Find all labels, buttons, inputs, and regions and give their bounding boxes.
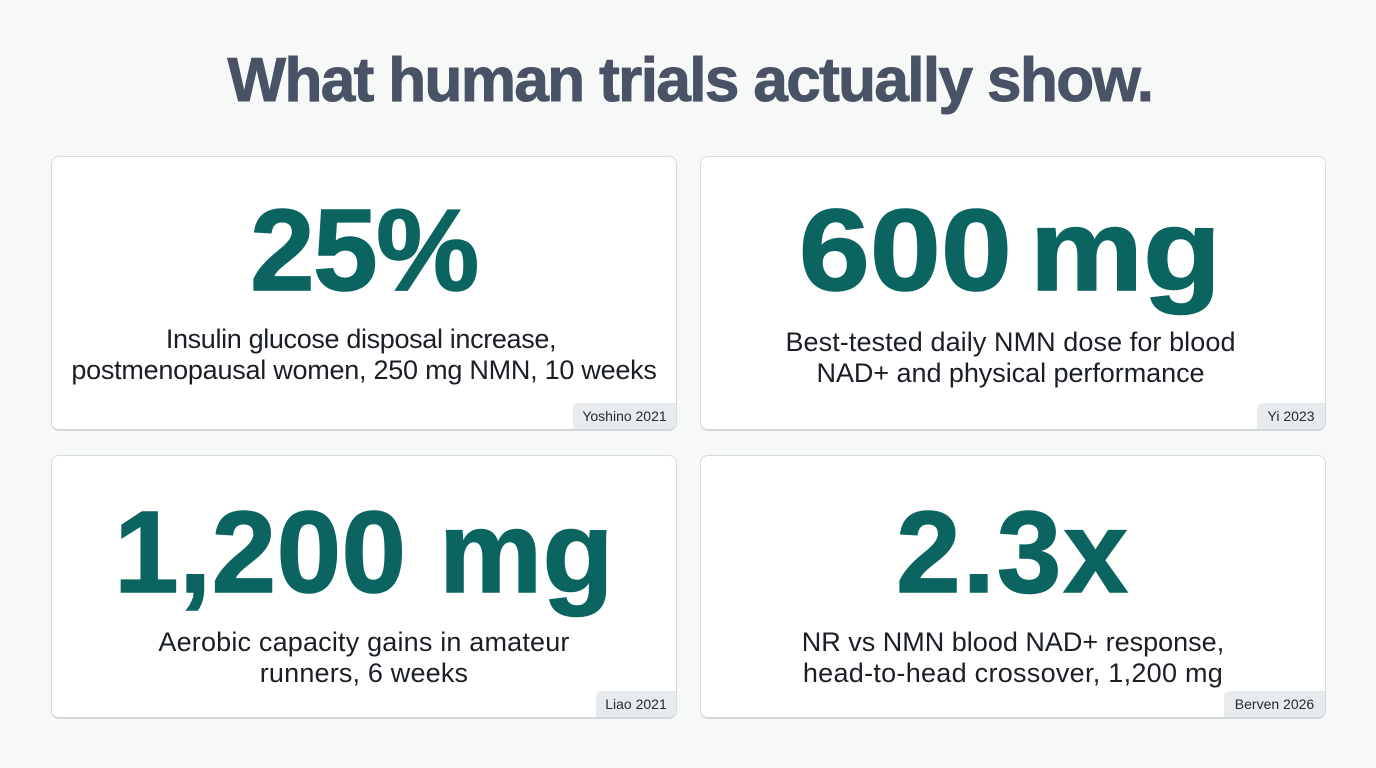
description: aerobic capacity <box>158 627 570 688</box>
source tag: Yoshino 2021: Yoshino 2021 <box>582 408 667 424</box>
description: NR vs NMN <box>802 627 1224 688</box>
panel: 2.3x stat <box>700 455 1326 719</box>
title: What human trials actually show. <box>228 46 1152 115</box>
panel: 600 mg stat <box>700 156 1326 431</box>
source tag: Yi 2023: Yi 2023 <box>1268 408 1314 424</box>
description: aerobic capacity: runners, 6 weeks <box>260 658 468 688</box>
stat: 600 mg: 600 mg <box>799 185 1221 315</box>
stat: 25%: 25% <box>250 185 478 315</box>
description: NR vs NMN: head-to-head crossover, 1,200 mg <box>803 658 1223 688</box>
source tag: Yoshino 2021 <box>573 403 676 429</box>
source tag: Liao 2021: Liao 2021 <box>605 696 667 712</box>
source tag: Liao 2021 <box>596 691 676 717</box>
description: NR vs NMN: NR vs NMN blood NAD+ response, <box>802 627 1224 657</box>
source tag: Berven 2026: Berven 2026 <box>1235 696 1314 712</box>
stat: 2.3x: 2.3x <box>896 487 1130 617</box>
description: insulin glucose disposal: Insulin glucose disposal increase, <box>166 324 556 354</box>
panel: 25% stat <box>51 156 677 431</box>
source tag: Berven 2026 <box>1224 691 1325 717</box>
description: aerobic capacity: Aerobic capacity gains in amateur <box>158 627 570 657</box>
stat: 1,200 mg: 1,200 mg <box>114 487 614 617</box>
description: insulin glucose disposal: postmenopausal women, 250 mg NMN, 10 weeks <box>71 355 657 385</box>
source tag: Yi 2023 <box>1257 403 1325 429</box>
description: insulin glucose disposal <box>71 324 657 385</box>
panel: 1,200 mg stat <box>51 455 677 719</box>
description: best-tested dose: Best-tested daily NMN dose for blood <box>785 327 1236 357</box>
description: best-tested dose <box>785 327 1236 388</box>
description: best-tested dose: NAD+ and physical performance <box>816 358 1204 388</box>
